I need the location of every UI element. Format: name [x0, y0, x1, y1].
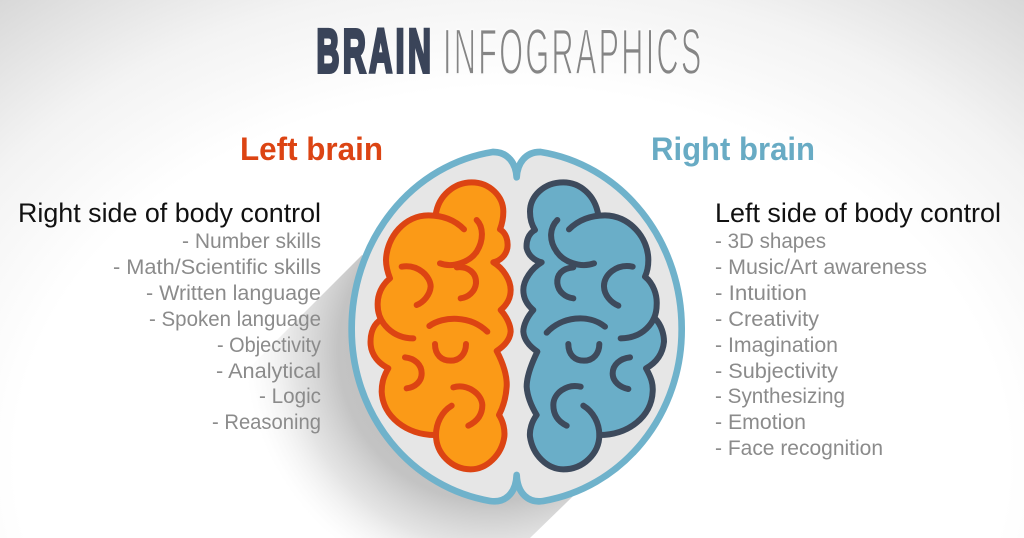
brain illustration — [352, 152, 682, 501]
text block: left list: - Reasoning — [212, 410, 321, 434]
text block: right list: - Imagination — [715, 333, 838, 357]
text block: left list — [18, 198, 321, 434]
text block: right list: - Intuition — [715, 281, 807, 305]
text block: right list: - Synthesizing — [715, 384, 845, 408]
title — [316, 15, 704, 88]
text block: left list: - Spoken language — [149, 307, 321, 331]
title: BRAIN — [316, 18, 434, 86]
text block: left list: Right side of body control — [18, 198, 321, 228]
heading: right brain: Right brain — [651, 131, 815, 167]
heading: left brain: Left brain — [240, 131, 383, 167]
text block: right list: Left side of body control — [715, 198, 1001, 228]
text block: left list: - Written language — [146, 281, 321, 305]
text block: left list: - Logic — [259, 384, 321, 408]
long shadow — [90, 255, 600, 538]
right hemisphere — [523, 182, 664, 469]
text block: left list: - Objectivity — [217, 333, 321, 357]
text block: right list: - Music/Art awareness — [715, 255, 927, 279]
title: INFOGRAPHICS — [443, 15, 704, 88]
text block: right list: - 3D shapes — [715, 229, 826, 253]
text block: left list: - Number skills — [182, 229, 321, 253]
head outline — [352, 152, 682, 501]
text block: right list: - Subjectivity — [715, 359, 838, 383]
text block: right list: - Creativity — [715, 307, 819, 331]
text block: left list: - Math/Scientific skills — [113, 255, 321, 279]
text block: right list: - Face recognition — [715, 436, 883, 460]
text block: right list — [715, 198, 1001, 460]
text block: left list: - Analytical — [216, 359, 321, 383]
text block: right list: - Emotion — [715, 410, 806, 434]
left hemisphere — [371, 182, 511, 469]
